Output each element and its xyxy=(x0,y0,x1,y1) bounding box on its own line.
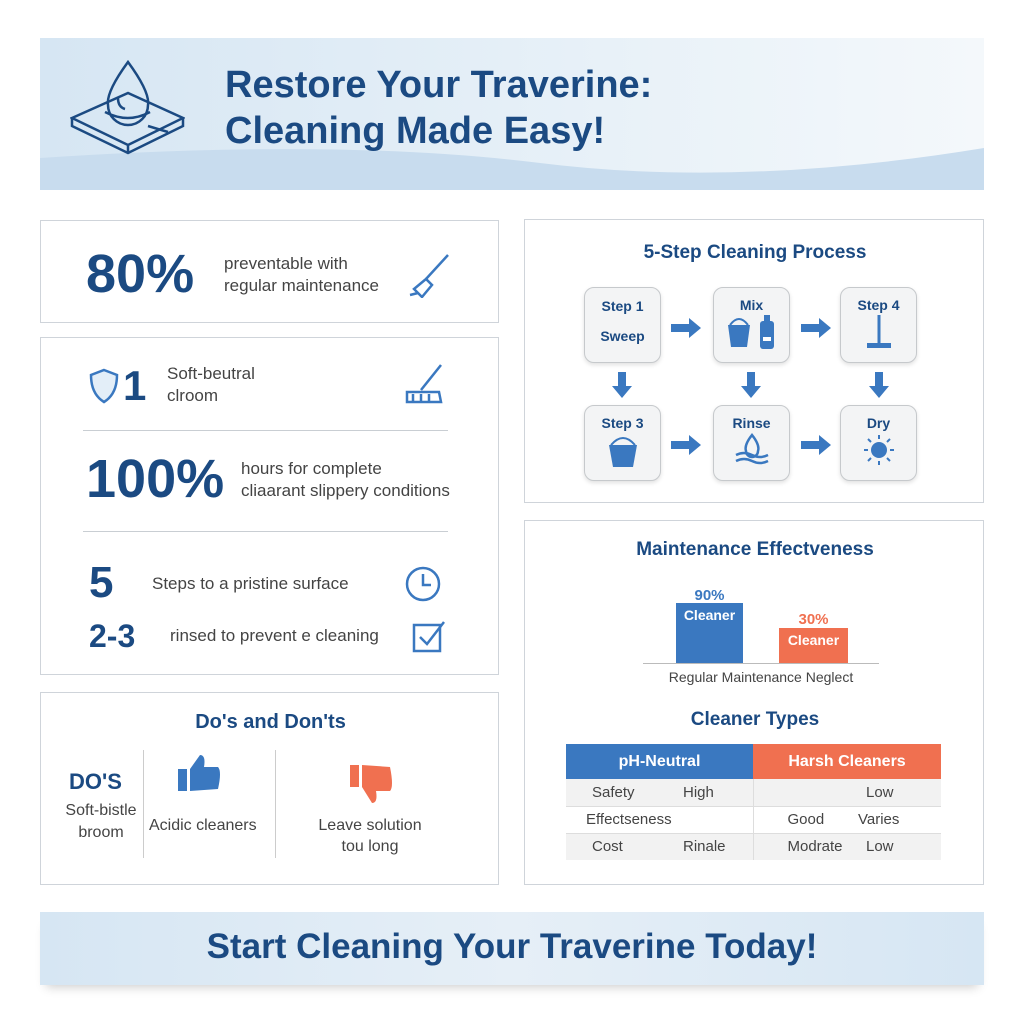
panel: 80% stat: regular maintenance xyxy=(224,276,379,295)
panel: maintenance effectiveness xyxy=(524,520,984,885)
table: cleaner types: Modrate xyxy=(788,838,843,855)
table: cleaner types: Harsh Cleaners xyxy=(788,752,906,770)
step 4: Step 4 xyxy=(857,297,900,313)
table: cleaner types: Good xyxy=(788,811,824,828)
panel: key stats: clroom xyxy=(167,386,218,405)
table: cleaner types: High xyxy=(683,784,714,801)
panel: do's and don'ts: Leave solution xyxy=(318,817,422,834)
panel: key stats: Steps to a pristine surface xyxy=(152,574,349,593)
table: cleaner types: Varies xyxy=(858,811,899,828)
icon: thumbs up xyxy=(178,755,220,791)
table: cleaner types: Rinale xyxy=(683,838,726,855)
bar chart: 90% xyxy=(694,587,725,604)
table: cleaner types: Low xyxy=(866,838,894,855)
step 1 xyxy=(584,287,661,363)
footer banner xyxy=(40,912,984,985)
panel: key stats xyxy=(40,337,499,675)
icon: broom xyxy=(410,254,449,298)
step 4 xyxy=(840,287,917,363)
panel: key stats: rinsed to prevent e cleaning xyxy=(170,626,379,645)
table: cleaner types: Safety xyxy=(592,784,635,801)
step 3: Step 3 xyxy=(601,415,644,431)
bar chart: Regular Maintenance Neglect xyxy=(669,669,853,685)
panel: do's and don'ts: Soft-bistle xyxy=(65,802,137,819)
panel: 80% stat: preventable with xyxy=(224,254,348,273)
panel: key stats: 2-3 xyxy=(89,618,135,654)
title: Cleaning Made Easy! xyxy=(225,110,605,152)
table: cleaner types: pH-Neutral xyxy=(619,752,700,770)
panel: maintenance effectiveness: Maintenance Effectveness xyxy=(636,539,874,560)
panel: do's and don'ts: Do's and Don'ts xyxy=(195,711,346,733)
step rinse xyxy=(713,405,790,481)
icon: shield xyxy=(90,368,118,404)
panel: do's and don'ts: tou long xyxy=(342,838,398,855)
step dry: Dry xyxy=(867,415,890,431)
step mix: Mix xyxy=(740,297,763,313)
panel: key stats: hours for complete xyxy=(241,459,382,478)
step rinse: Rinse xyxy=(732,415,771,431)
table: cleaner types: Low xyxy=(866,784,894,801)
bar chart: 30% xyxy=(798,611,829,628)
step 3 xyxy=(584,405,661,481)
step mix xyxy=(713,287,790,363)
table: cleaner types: Cost xyxy=(592,838,623,855)
panel: do's and don'ts: Acidic cleaners xyxy=(149,817,257,834)
bar chart xyxy=(643,587,879,685)
panel: key stats: cliaarant slippery conditions xyxy=(241,481,450,500)
panel: do's and don'ts: DO'S xyxy=(69,769,122,794)
icon: tile with water drop xyxy=(70,60,185,154)
icon: checkbox xyxy=(412,621,445,652)
panel: key stats: 1 xyxy=(123,362,146,409)
panel: do's and don'ts xyxy=(40,692,499,885)
bar chart: Cleaner xyxy=(788,632,839,648)
panel: maintenance effectiveness: Cleaner Types xyxy=(691,709,819,730)
step 1: Step 1 xyxy=(601,298,644,314)
title xyxy=(225,64,652,152)
panel: key stats: Soft-beutral xyxy=(167,364,255,383)
icon: thumbs down xyxy=(350,765,392,803)
panel: 80% stat: 80% xyxy=(86,244,194,304)
panel: 80% stat xyxy=(40,220,499,323)
panel: key stats: 5 xyxy=(89,558,113,607)
icon: clock xyxy=(406,566,440,602)
panel: do's and don'ts: broom xyxy=(78,824,124,841)
step 1: Sweep xyxy=(600,328,645,344)
header banner xyxy=(40,38,984,190)
title: Restore Your Traverine: xyxy=(225,64,652,106)
icon: brush xyxy=(406,364,442,404)
table: cleaner types: Effectseness xyxy=(586,811,672,828)
panel: 5-step process xyxy=(524,219,984,503)
footer banner: Start Cleaning Your Traverine Today! xyxy=(207,927,817,966)
panel: key stats: 100% xyxy=(86,449,224,509)
table: cleaner types xyxy=(566,744,941,860)
panel: 5-step process: 5-Step Cleaning Process xyxy=(644,242,866,263)
bar chart: Cleaner xyxy=(684,607,735,623)
step dry xyxy=(840,405,917,481)
arrows xyxy=(612,318,889,455)
